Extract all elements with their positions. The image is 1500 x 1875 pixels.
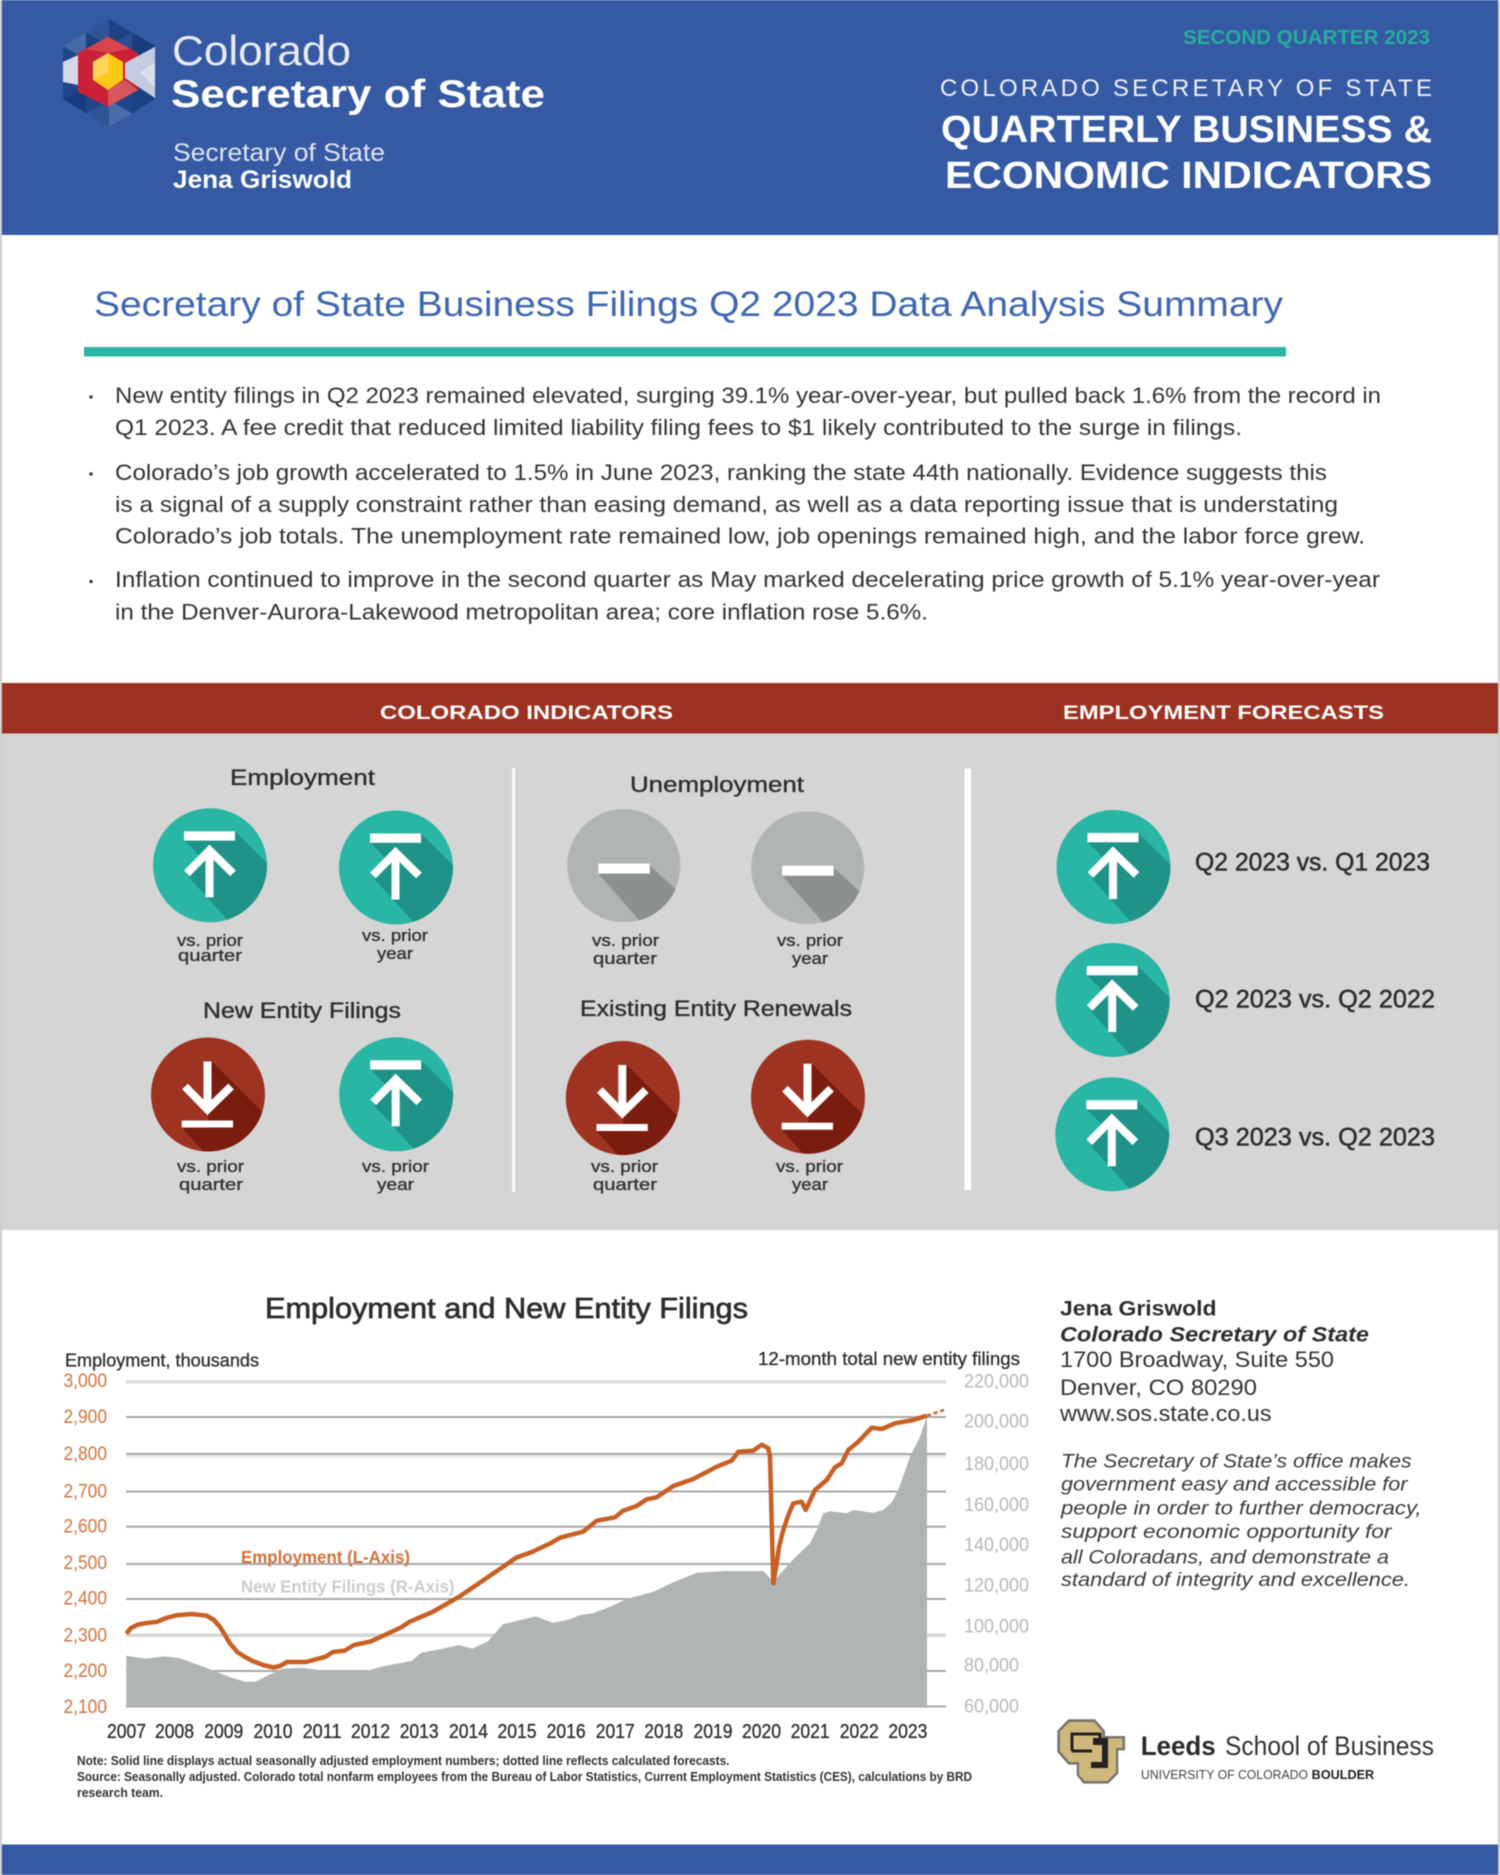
x axis years: 2019	[694, 1721, 732, 1743]
panel: indicators	[0, 683, 1500, 1244]
caption: vs. prior	[362, 927, 429, 945]
right axis labels: 180,000	[964, 1453, 1029, 1475]
mission statement: government easy and accessible for	[1061, 1474, 1409, 1496]
caption	[591, 1158, 659, 1194]
icon: flat vs prior year	[751, 811, 870, 943]
right axis labels: 220,000	[964, 1370, 1029, 1392]
icon: down arrow vs prior year	[751, 1040, 883, 1177]
mission statement	[1060, 1450, 1422, 1591]
summary bullets	[89, 383, 1381, 624]
chart note and source	[77, 1754, 972, 1800]
contact block: Colorado Secretary of State	[1060, 1324, 1369, 1346]
publication title: QUARTERLY BUSINESS &	[941, 109, 1432, 151]
forecast dotted line	[927, 1410, 944, 1416]
indicator group: Unemployment	[567, 772, 870, 968]
right axis labels: 200,000	[964, 1410, 1029, 1432]
legend: employment: Employment (L-Axis)	[241, 1547, 410, 1567]
indicator group: New Entity Filings	[151, 998, 506, 1204]
logo wordmark: Secretary of State	[171, 73, 545, 116]
x axis years: 2017	[596, 1721, 635, 1743]
bullet 3	[89, 567, 1380, 624]
left axis labels: 2,900	[64, 1406, 107, 1428]
forecast: Q2 2023 vs Q1 2023	[1056, 810, 1430, 977]
icon: flat vs prior quarter	[567, 809, 686, 941]
bullet 1: New entity filings in Q2 2023 remained elevated, surging 39.1% year-over-year, but pulled back 1.6% from the record in	[115, 383, 1381, 408]
chart: employment and new entity filings	[64, 1293, 1029, 1800]
left axis labels: 3,000	[64, 1370, 107, 1392]
publication title: ECONOMIC INDICATORS	[945, 155, 1432, 197]
right axis title: 12-month total new entity filings	[758, 1348, 1020, 1369]
contact block: Denver, CO 80290	[1060, 1375, 1257, 1400]
x axis years: 2011	[303, 1721, 342, 1743]
secretary name: Secretary of State	[173, 139, 385, 167]
heading: employment forecasts: EMPLOYMENT FORECASTS	[1063, 703, 1384, 724]
x axis years: 2012	[351, 1721, 390, 1743]
left axis labels: 2,300	[64, 1624, 107, 1646]
mission statement: standard of integrity and excellence.	[1061, 1569, 1410, 1591]
x axis years: 2016	[547, 1721, 586, 1743]
wordmark: School of Business	[1225, 1731, 1434, 1761]
right axis labels: 140,000	[964, 1534, 1029, 1556]
caption: year	[377, 945, 414, 963]
indicator group: Employment: Employment	[230, 765, 375, 790]
forecast: Q2 2023 vs Q2 2022: Q2 2023 vs. Q2 2022	[1195, 986, 1435, 1014]
chart title: Employment and New Entity Filings	[265, 1293, 748, 1325]
x axis years: 2013	[400, 1721, 439, 1743]
left axis labels: 2,700	[64, 1480, 107, 1502]
bullet 1: Q1 2023. A fee credit that reduced limited liability filing fees to $1 likely contributed to the surge in filings.	[115, 415, 1242, 440]
chart note and source: research team.	[77, 1786, 163, 1800]
bullet 2	[89, 460, 1365, 548]
section title: Secretary of State Business Filings Q2 2023 Data Analysis Summary	[94, 285, 1284, 324]
left axis labels: 2,600	[64, 1516, 107, 1538]
indicator group: Existing Entity Renewals	[566, 996, 883, 1194]
bullet 2: Colorado’s job growth accelerated to 1.5% in June 2023, ranking the state 44th nationally. Evidence suggests this	[115, 460, 1327, 485]
x axis years: 2014	[449, 1721, 488, 1743]
left axis labels: 2,500	[64, 1552, 107, 1574]
wordmark: BOULDER	[1312, 1768, 1374, 1782]
indicator group: Employment	[153, 765, 506, 978]
caption: vs. prior	[776, 1158, 844, 1176]
bullet 3: Inflation continued to improve in the second quarter as May marked decelerating price growth of 5.1% year-over-year	[115, 567, 1380, 592]
x axis years: 2021	[791, 1721, 830, 1743]
indicator group: Existing Entity Renewals: Existing Entity Renewals	[580, 996, 852, 1021]
x axis years: 2022	[840, 1721, 879, 1743]
contact block: 1700 Broadway, Suite 550	[1060, 1347, 1334, 1372]
x axis years: 2007	[107, 1721, 146, 1743]
forecast: Q2 2023 vs Q2 2022	[1056, 943, 1435, 1110]
caption: vs. prior	[362, 1158, 430, 1176]
x axis years: 2009	[204, 1721, 243, 1743]
caption: vs. prior	[177, 932, 244, 950]
forecast: Q3 2023 vs Q2 2023: Q3 2023 vs. Q2 2023	[1195, 1124, 1435, 1152]
logo: Colorado hexagon mark	[63, 19, 155, 127]
caption	[776, 1158, 844, 1194]
left axis labels: 2,400	[64, 1588, 107, 1610]
caption: year	[792, 1176, 829, 1194]
x axis years: 2010	[254, 1721, 292, 1743]
caption: quarter	[178, 947, 243, 965]
new entity filings area	[126, 1416, 927, 1706]
contact block: www.sos.state.co.us	[1059, 1401, 1272, 1426]
left axis labels: 2,800	[64, 1443, 107, 1465]
heading: Colorado indicators: COLORADO INDICATORS	[380, 703, 673, 724]
right axis labels	[964, 1370, 1029, 1717]
bullet 2: is a signal of a supply constraint rather than easing demand, as well as a data reporting issue that is understating	[115, 492, 1338, 517]
logo wordmark	[171, 27, 545, 116]
publication title	[940, 75, 1432, 197]
icon: CU interlock mark	[1057, 1719, 1125, 1784]
indicator group: New Entity Filings: New Entity Filings	[203, 998, 401, 1023]
mission statement: all Coloradans, and demonstrate a	[1061, 1546, 1389, 1568]
left axis labels	[64, 1370, 107, 1718]
footer band	[0, 1844, 1500, 1875]
caption: vs. prior	[591, 1158, 659, 1176]
right axis labels: 160,000	[964, 1494, 1029, 1516]
right axis labels: 100,000	[964, 1615, 1029, 1637]
bullet 1	[89, 383, 1381, 440]
x axis years: 2020	[742, 1721, 781, 1743]
contact block	[1059, 1298, 1369, 1426]
caption: vs. prior	[777, 932, 844, 950]
wordmark: Leeds	[1141, 1731, 1216, 1761]
secretary name	[173, 139, 385, 194]
right axis labels: 60,000	[964, 1695, 1019, 1717]
left axis labels: 2,200	[64, 1660, 107, 1682]
caption: quarter	[179, 1176, 244, 1194]
icon: down arrow vs prior quarter	[151, 1038, 283, 1174]
x axis years: 2008	[155, 1721, 194, 1743]
right axis labels: 80,000	[964, 1655, 1019, 1677]
secretary name: Jena Griswold	[173, 166, 352, 194]
x axis years: 2015	[498, 1721, 536, 1743]
x axis years	[107, 1721, 927, 1743]
Leeds logo	[1057, 1719, 1434, 1784]
indicator group: Unemployment: Unemployment	[630, 772, 804, 797]
logo wordmark: Colorado	[172, 27, 351, 74]
caption	[592, 932, 660, 968]
icon: up arrow vs prior year	[339, 810, 506, 978]
left axis labels: 2,100	[64, 1696, 107, 1718]
caption: year	[792, 950, 829, 968]
caption: year	[377, 1176, 415, 1194]
quarter label: SECOND QUARTER 2023	[1183, 27, 1430, 49]
caption	[177, 932, 244, 965]
title underline	[84, 347, 1286, 356]
chart note and source: Source: Seasonally adjusted. Colorado total nonfarm employees from the Bureau of Labor Statistics, Current Employment Statistics (CES), calculations by BRD	[77, 1770, 972, 1784]
mission statement: The Secretary of State’s office makes	[1061, 1450, 1412, 1472]
header band	[0, 0, 1500, 235]
forecast: Q3 2023 vs Q2 2023	[1055, 1077, 1435, 1244]
caption	[362, 927, 429, 963]
caption: quarter	[593, 1176, 658, 1194]
wordmark: UNIVERSITY OF COLORADO	[1141, 1768, 1308, 1782]
wordmark	[1141, 1731, 1434, 1782]
forecast: Q2 2023 vs Q1 2023: Q2 2023 vs. Q1 2023	[1195, 848, 1430, 876]
x axis years: 2023	[888, 1721, 927, 1743]
chart note and source: Note: Solid line displays actual seasonally adjusted employment numbers; dotted line reflects calculated forecasts.	[77, 1754, 730, 1768]
caption: vs. prior	[592, 932, 660, 950]
icon: down arrow vs prior quarter	[566, 1041, 698, 1178]
publication title: COLORADO SECRETARY OF STATE	[940, 75, 1432, 102]
contact block: Jena Griswold	[1060, 1298, 1216, 1320]
bullet 2: Colorado’s job totals. The unemployment rate remained low, job openings remained high, and the labor force grew.	[115, 524, 1365, 548]
right axis labels: 120,000	[964, 1575, 1029, 1597]
caption: vs. prior	[177, 1158, 245, 1176]
left axis title: Employment, thousands	[65, 1350, 259, 1370]
icon: up arrow vs prior quarter	[153, 808, 320, 975]
mission statement: people in order to further democracy,	[1060, 1498, 1422, 1520]
legend: new entity filings: New Entity Filings (R-Axis)	[241, 1576, 454, 1596]
caption	[777, 932, 844, 968]
bullet 3: in the Denver-Aurora-Lakewood metropolitan area; core inflation rose 5.6%.	[115, 600, 928, 624]
icon: up arrow vs prior year	[339, 1037, 506, 1204]
mission statement: support economic opportunity for	[1061, 1521, 1393, 1543]
employment line	[126, 1416, 927, 1668]
caption: quarter	[593, 950, 658, 968]
caption	[362, 1158, 430, 1194]
caption	[177, 1158, 245, 1194]
x axis years: 2018	[644, 1721, 683, 1743]
